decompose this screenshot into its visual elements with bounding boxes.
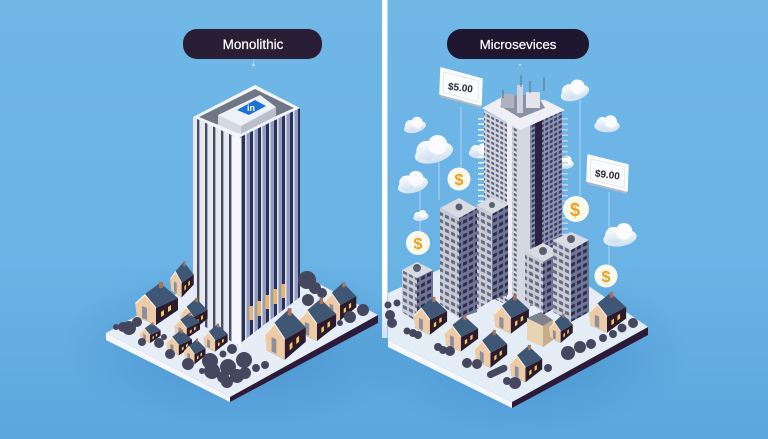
cloud 5 [594, 115, 620, 132]
house: large right [265, 308, 306, 360]
tower E [402, 262, 433, 322]
house 1 [414, 297, 447, 335]
cloud 3 [395, 168, 430, 196]
platform [106, 250, 378, 402]
small office [527, 312, 553, 347]
house 3 [475, 330, 507, 368]
bushes [384, 300, 638, 389]
house 4 [494, 295, 529, 334]
coin 2 [563, 196, 589, 222]
house: small front left [140, 322, 161, 343]
tower C [525, 243, 560, 315]
coin 3: $ [414, 236, 423, 253]
platform shadow [60, 260, 430, 430]
coin 3 [406, 231, 430, 255]
arrow: microservices [518, 64, 522, 66]
logo: in [247, 103, 255, 113]
house 8 [589, 292, 626, 333]
house 2 [445, 315, 478, 351]
clouds [395, 76, 638, 249]
coins [406, 168, 618, 288]
roof [193, 85, 300, 138]
cloud 4 [557, 76, 591, 105]
cloud behind tower left [469, 143, 491, 159]
cloud behind tower right [554, 156, 574, 169]
house 5 [510, 345, 542, 382]
houses [135, 261, 356, 364]
tower B [476, 197, 508, 310]
platform [388, 235, 648, 408]
house: centre back [180, 298, 207, 330]
coin 2: $ [570, 200, 580, 220]
bushes [113, 271, 369, 388]
platform shadow [350, 265, 690, 435]
logo [237, 100, 266, 115]
house: mid right [299, 298, 336, 341]
skyscraper [193, 85, 300, 346]
house: beside tower [203, 324, 228, 352]
price sign: $5.00: $5.00 [447, 82, 474, 96]
price sign: $5.00 [440, 68, 482, 108]
cloud 1 [402, 115, 427, 135]
house: back [170, 261, 194, 297]
tower D [553, 232, 589, 322]
arrow: monolithic [252, 61, 255, 66]
lit windows [249, 284, 285, 320]
label: Monolithic: Monolithic [223, 37, 284, 52]
coin 1 [448, 168, 470, 190]
divider [382, 0, 388, 338]
label: Monolithic [183, 29, 322, 59]
cloud 7 [412, 209, 429, 222]
cloud 2 [411, 132, 455, 168]
panel: microservices [350, 29, 690, 435]
house: far back right [324, 282, 356, 321]
house: front [184, 339, 206, 364]
house: centre [174, 313, 200, 338]
coin 1: $ [455, 172, 464, 189]
house: large left [135, 282, 178, 325]
houses [414, 292, 626, 382]
price sign: $9.00 [587, 155, 628, 194]
label: Microservices: Microsevices [480, 37, 557, 52]
house: middle [166, 330, 192, 355]
house 7 [549, 314, 573, 343]
coin 4: $ [602, 269, 611, 286]
connector lines [420, 100, 609, 265]
label: Microservices [447, 29, 589, 59]
central tower [482, 75, 565, 312]
cloud 6 [601, 221, 638, 249]
tower A [440, 198, 477, 318]
panel: monolithic [60, 29, 430, 430]
price sign: $9.00: $9.00 [594, 169, 621, 183]
coin 4 [594, 264, 618, 288]
roof box [218, 95, 276, 134]
